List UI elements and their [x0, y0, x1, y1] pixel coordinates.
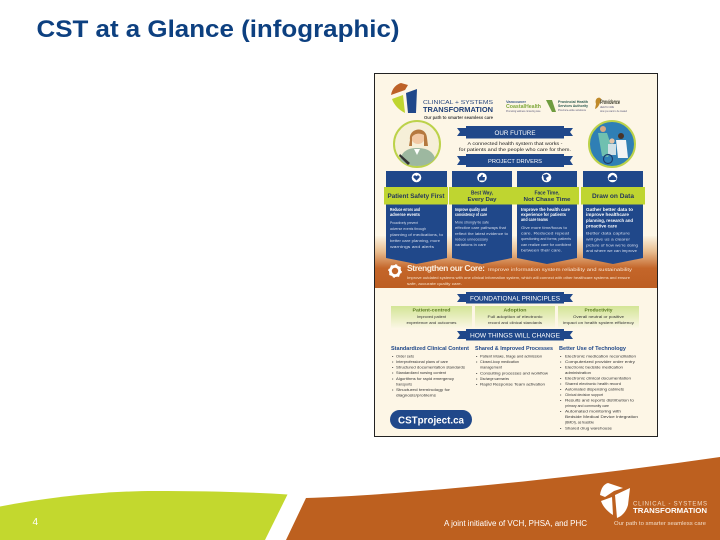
button: CSTproject.ca	[390, 410, 472, 429]
panel: draw on data: Gather better data to	[586, 207, 634, 212]
list: shared and improved processes: Rapid Response Team activation	[480, 382, 545, 386]
list: better use of technology: •	[560, 408, 562, 414]
panel: best way every day: variations in care	[455, 243, 486, 247]
panel: draw on data: Draw on Data	[592, 193, 635, 200]
list: better use of technology: Bedside Medical Device Integration	[565, 414, 638, 419]
banner: foundational principles	[457, 292, 573, 304]
footer: CST logo: Our path to smarter seamless care	[614, 521, 706, 527]
icon: partner logos	[506, 98, 627, 113]
panel: face time not chase time: can realize care for confident	[521, 243, 571, 247]
list: better use of technology: •	[560, 426, 562, 430]
slide number: 4	[32, 517, 38, 528]
panel: patient safety first: Proactively prevent	[390, 221, 418, 225]
list: better use of technology: Better Use of Technology	[559, 346, 626, 352]
panel: best way every day	[449, 171, 515, 264]
list: better use of technology: Results and reports distribution to	[565, 398, 634, 402]
list: shared and improved processes	[475, 346, 553, 386]
banner: our future: OUR FUTURE	[494, 130, 536, 137]
panel: face time not chase time: and care teams	[521, 217, 549, 222]
panel: productivity: Productivity	[584, 308, 613, 312]
panel: draw on data: Better data capture	[586, 232, 630, 236]
panel: draw on data: will give us a clearer	[586, 238, 631, 242]
icon: poster logo: TRANSFORMATION	[423, 105, 493, 114]
banner: project drivers	[457, 154, 573, 167]
panel: patient-centred: experience and outcomes	[406, 320, 456, 325]
panel: adoption: Adoption	[504, 308, 527, 312]
list: standardized clinical content: transports	[396, 382, 412, 386]
icon: partner logos: CoastalHealth	[506, 104, 541, 110]
panel: draw on data: proactive care	[586, 224, 618, 228]
panel: adoption: Full adoption of electronic	[488, 314, 542, 319]
list: standardized clinical content: Structured terminology for	[396, 387, 451, 392]
list: standardized clinical content: •	[392, 370, 394, 375]
panel: infographic poster	[374, 74, 658, 436]
panel: patient safety first: better care planning, more	[390, 239, 440, 243]
panel: face time not chase time: questioning and forms; patients	[521, 237, 571, 241]
icon: cloud	[608, 173, 617, 182]
icon: patient and care team portrait	[589, 121, 635, 167]
icon: globe	[542, 173, 551, 182]
panel: draw on data: and where we can improve	[586, 249, 637, 253]
panel: patient-centred	[391, 306, 472, 328]
icon: partner logos: Services Authority	[558, 104, 588, 108]
panel: productivity	[558, 306, 639, 328]
panel: patient-centred: Improved patient	[417, 314, 447, 319]
list: shared and improved processes: Shared & Improved Processes	[475, 346, 553, 352]
list: better use of technology	[559, 346, 638, 430]
list: better use of technology: Electronic bedside medication	[565, 364, 623, 370]
list: shared and improved processes: •	[476, 370, 478, 376]
footer: orange swoosh	[286, 457, 720, 540]
footer: CST logo: TRANSFORMATION	[633, 508, 707, 515]
icon: thumbs up	[477, 173, 487, 182]
panel: draw on data: improve healthcare	[586, 212, 630, 217]
panel: patient safety first: adverse events through	[390, 227, 426, 231]
list: standardized clinical content: •	[392, 354, 394, 358]
button: CSTproject.ca: CSTproject.ca	[398, 414, 464, 426]
list: better use of technology: primary and community care	[565, 403, 609, 408]
text: vision statement: A connected health system that works -	[468, 141, 563, 147]
panel: best way every day: Best Way,	[471, 190, 493, 196]
list: better use of technology: Clinical decision support	[565, 392, 604, 397]
list: better use of technology: •	[560, 386, 562, 392]
list: better use of technology: •	[560, 392, 562, 397]
banner: project drivers: PROJECT DRIVERS	[488, 159, 542, 165]
panel: patient safety first: planning of medications, to	[390, 233, 443, 237]
list: standardized clinical content: Structured documentation standards	[396, 364, 465, 370]
callout: strengthen our core: safe, accurate quality care.	[407, 282, 462, 286]
list: better use of technology: Shared electronic health record	[565, 381, 621, 386]
icon: gear	[389, 265, 401, 277]
panel: face time not chase time: Not Chase Time	[524, 197, 571, 203]
callout: strengthen our core: Improve outdated systems with one clinical information system, which will connect with other healthcare systems and ensure	[407, 276, 630, 280]
panel: adoption: record and clinical standards	[488, 320, 542, 325]
list: shared and improved processes: •	[476, 376, 478, 381]
panel: best way every day: reflect the latest evidence to	[455, 232, 508, 236]
list: standardized clinical content: •	[392, 359, 394, 364]
panel: patient safety first: adverse events	[390, 212, 421, 217]
panel: face time not chase time: Give more time/focus to	[521, 226, 567, 230]
icon: poster logo: CLINICAL + SYSTEMS	[423, 100, 493, 106]
list: standardized clinical content: Standardized nursing content	[396, 370, 447, 375]
list: standardized clinical content: Algorithms for rapid emergency	[396, 376, 454, 381]
list: shared and improved processes: management	[480, 364, 503, 370]
list: better use of technology: •	[560, 398, 562, 402]
banner: how things will change: HOW THINGS WILL CHANGE	[470, 334, 560, 340]
panel: draw on data	[581, 171, 645, 264]
list: better use of technology: •	[560, 381, 562, 386]
banner: our future	[457, 126, 573, 138]
list: shared and improved processes: •	[476, 359, 478, 364]
list: shared and improved processes: Discharge summaries	[480, 376, 509, 381]
banner: how things will change	[457, 329, 573, 340]
panel: patient safety first: Patient Safety First	[388, 193, 444, 200]
icon: poster logo	[391, 83, 494, 120]
list: shared and improved processes: •	[476, 382, 478, 386]
icon: partner logos: Provincial Health	[558, 100, 588, 104]
panel: best way every day: More strongly tie safe	[455, 220, 489, 224]
list: shared and improved processes: Consulting processes and workflow	[480, 370, 548, 376]
panel: face time not chase time: Face Time,	[534, 190, 560, 196]
list: standardized clinical content: Interprofessional plans of care	[396, 359, 448, 364]
list: better use of technology: Electronic medication reconciliation	[565, 354, 636, 358]
panel: patient safety first	[384, 171, 448, 264]
panel: face time not chase time: between their care.	[521, 248, 562, 252]
list: better use of technology: Computerized provider order entry	[565, 359, 635, 364]
icon: partner logos: Province-wide solutions	[558, 108, 587, 112]
panel: draw on data: planning, research and	[586, 218, 634, 223]
panel: face time not chase time: Improve the health care	[521, 207, 571, 212]
panel: patient-centred: Patient-centred	[412, 308, 451, 312]
list: standardized clinical content: •	[392, 364, 394, 370]
icon: care provider portrait	[394, 121, 440, 167]
panel: productivity: Overall neutral or positive	[573, 314, 625, 319]
icon: partner logos: Providence	[600, 100, 620, 106]
panel: patient safety first: warnings and alerts	[390, 245, 434, 249]
footer: CST logo	[600, 483, 707, 527]
icon: heart	[412, 173, 421, 182]
icon: partner logos: HEALTH CARE	[600, 105, 614, 109]
list: better use of technology: •	[560, 364, 562, 370]
callout: strengthen our core: Strengthen our Core:	[407, 263, 485, 273]
panel: best way every day: effective care pathways that	[455, 226, 506, 230]
panel: orange core background	[375, 236, 657, 288]
banner: foundational principles: FOUNDATIONAL PRINCIPLES	[470, 296, 560, 302]
list: shared and improved processes: •	[476, 354, 478, 358]
list: better use of technology: •	[560, 354, 562, 358]
panel: patient safety first: Reduce errors and	[390, 207, 420, 212]
icon: partner logos: How you want to be treated	[600, 109, 627, 113]
panel: best way every day: consistency of care	[455, 212, 488, 217]
panel: best way every day: Every Day	[468, 197, 497, 203]
list: standardized clinical content: Order sets	[396, 354, 414, 358]
panel: face time not chase time: care. Reduced repeat	[521, 232, 569, 236]
list: standardized clinical content: •	[392, 387, 394, 392]
panel: best way every day: Improve quality and	[455, 207, 487, 212]
list: standardized clinical content	[391, 346, 469, 398]
panel: adoption	[475, 306, 555, 328]
icon: partner logos: Vancouver	[506, 100, 527, 104]
text: vision statement: for patients and the people who care for them.	[459, 147, 571, 153]
panel: face time not chase time	[515, 171, 579, 264]
list: better use of technology: (BMDI), as feasible	[565, 420, 594, 424]
footer: joint initiative text: A joint initiative of VCH, PHSA, and PHC	[444, 519, 587, 528]
callout: strengthen our core: Improve information system reliability and sustainability	[488, 267, 633, 272]
footer: CST logo: CLINICAL - SYSTEMS	[633, 502, 707, 508]
list: better use of technology: Shared drug warehouse	[565, 426, 612, 430]
icon: poster logo: Our path to smarter seamless care	[424, 115, 494, 120]
list: better use of technology: Automated monitoring with	[565, 408, 621, 414]
list: standardized clinical content: diagnosis/problems	[396, 392, 436, 398]
list: better use of technology: administration	[565, 370, 591, 375]
list: standardized clinical content: •	[392, 376, 394, 381]
callout: strengthen our core	[389, 263, 633, 286]
list: better use of technology: •	[560, 376, 562, 380]
text: vision statement	[459, 141, 571, 153]
panel: best way every day: reduce unnecessary	[455, 238, 488, 242]
list: better use of technology: Electronic clinical documentation	[565, 376, 631, 380]
panel: productivity: impact on health system efficiency	[563, 320, 634, 325]
title: CST at a Glance (infographic)	[36, 16, 399, 43]
panel: face time not chase time: experience for patients	[521, 212, 567, 217]
icon: partner logos: Promoting wellness. Ensuring care.	[506, 109, 541, 113]
panel: draw on data: picture of how we're doing	[586, 244, 638, 248]
list: standardized clinical content: Standardized Clinical Content	[391, 346, 469, 352]
list: shared and improved processes: Patient intake, triage and admission	[480, 354, 542, 358]
list: shared and improved processes: Closed-loop medication	[480, 359, 519, 364]
list: better use of technology: •	[560, 359, 562, 364]
list: better use of technology: Automated dispensing cabinets	[565, 386, 624, 392]
footer: green swoosh	[0, 491, 288, 540]
